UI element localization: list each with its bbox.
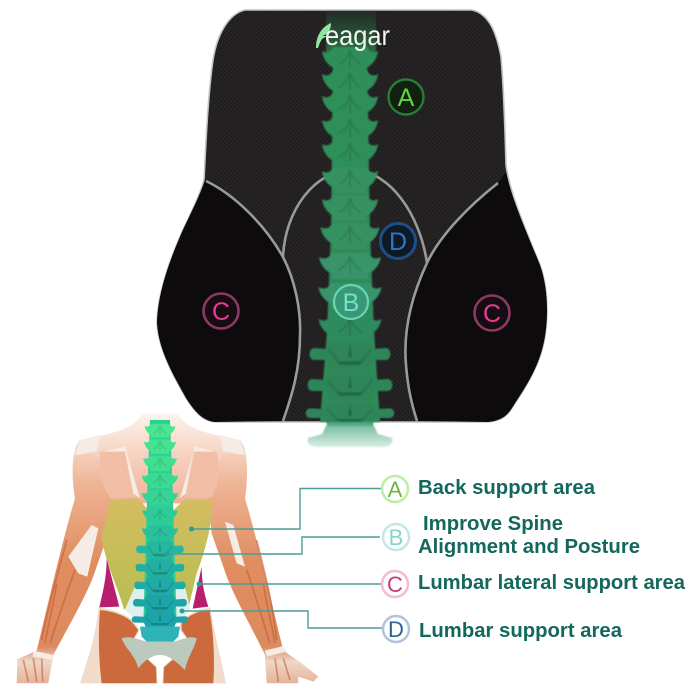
trapezius left xyxy=(99,450,137,497)
legend item D: Lumbar support area xyxy=(419,620,623,642)
lower back fascia xyxy=(125,587,190,623)
legend item C: C xyxy=(387,572,403,597)
forearm muscle striations xyxy=(23,540,290,682)
leader line C xyxy=(196,582,381,586)
badge C left: C xyxy=(212,298,230,326)
icon: logo leaf xyxy=(316,23,331,48)
legend item C: Lumbar lateral support area xyxy=(418,572,686,594)
spine fading out below cushion xyxy=(308,422,392,447)
badge C right xyxy=(474,296,510,330)
badge A xyxy=(388,80,424,114)
badge C right: C xyxy=(483,300,501,328)
right arm xyxy=(208,440,318,683)
oblique magenta left xyxy=(99,558,119,607)
gluteal muscle left xyxy=(80,607,157,683)
pelvis xyxy=(122,637,197,670)
legend item B xyxy=(383,513,640,558)
faint top band xyxy=(326,11,376,53)
left arm xyxy=(17,440,112,683)
lumbar spine overlay xyxy=(306,11,394,426)
cushion xyxy=(157,10,547,426)
arm tendons xyxy=(33,435,287,660)
gluteal muscle right xyxy=(163,607,226,683)
logo: eagar xyxy=(325,20,390,51)
badge A: A xyxy=(398,84,415,112)
cushion body xyxy=(157,10,547,422)
leader line A xyxy=(189,488,381,532)
legend xyxy=(382,476,686,642)
legend item D: D xyxy=(388,617,404,642)
badge D: D xyxy=(389,228,407,256)
anatomy figure xyxy=(17,413,318,683)
legend item A: A xyxy=(388,477,403,502)
gluteal fibres right xyxy=(163,610,214,683)
grey piping seams xyxy=(206,170,498,421)
badge B xyxy=(334,285,368,319)
leader line D xyxy=(180,608,382,628)
left side panel C xyxy=(157,180,300,422)
legend item B: B xyxy=(389,525,403,550)
latissimus muscle xyxy=(102,498,212,609)
legend item B: Alignment and Posture xyxy=(418,536,640,558)
leader line B xyxy=(164,537,380,556)
trapezius right xyxy=(185,450,219,497)
oblique magenta right xyxy=(193,567,208,609)
badge B: B xyxy=(343,289,359,317)
gluteal fibres left xyxy=(99,610,157,683)
legend item A xyxy=(382,476,596,502)
body spine xyxy=(132,420,188,642)
legend item B: Improve Spine xyxy=(423,513,563,535)
badge D xyxy=(380,224,416,258)
upper back and shoulders xyxy=(74,413,245,503)
spine column xyxy=(320,50,380,422)
sacrum xyxy=(140,627,180,642)
legend item A: Back support area xyxy=(418,477,596,499)
right side panel C xyxy=(405,172,547,422)
badge C left xyxy=(204,294,238,328)
